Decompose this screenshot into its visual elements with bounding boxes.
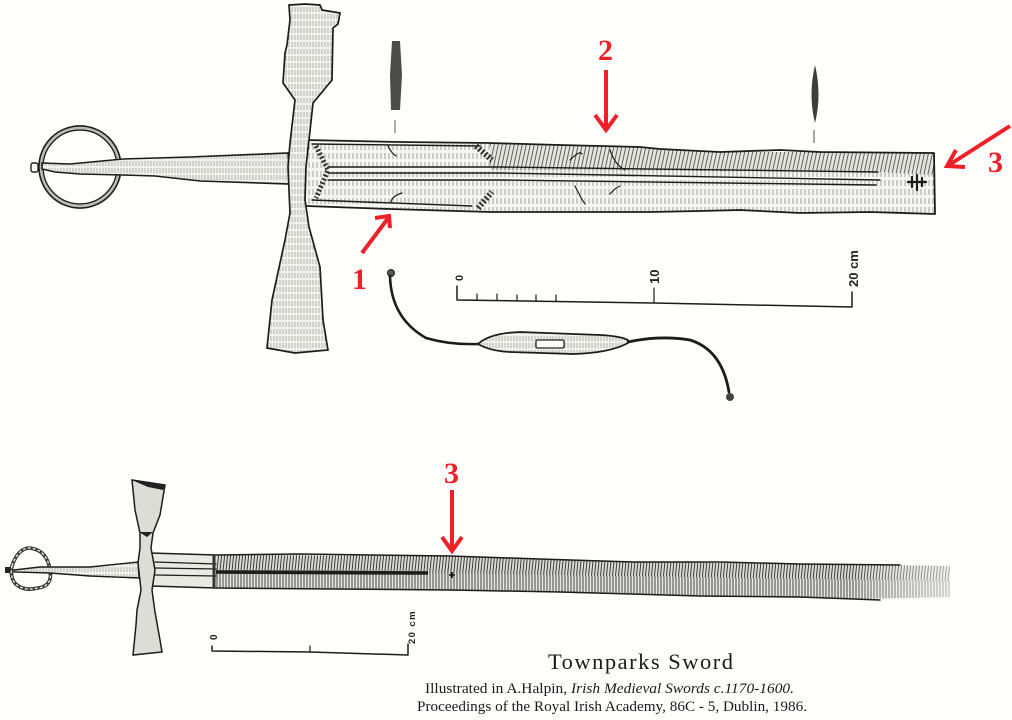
label 2: 2	[598, 34, 613, 67]
arrow 3, lower	[442, 490, 462, 551]
cross-section: grip	[390, 41, 402, 133]
title: Townparks Sword	[548, 649, 733, 674]
pommel ring	[31, 126, 121, 208]
arrow 1	[362, 216, 390, 253]
blade maker's mark	[908, 175, 926, 190]
scabbard chape section	[388, 270, 734, 401]
blade	[306, 140, 935, 214]
arrow 2	[595, 70, 617, 130]
lower scale label 20 cm: 20 cm	[407, 610, 418, 644]
citation line 2: Proceedings of the Royal Irish Academy, 86C - 5, Dublin, 1986.	[417, 699, 807, 715]
upper sword drawing	[31, 4, 935, 353]
arrow 3, upper	[947, 126, 1010, 167]
crossguard	[267, 4, 340, 353]
lower grip	[14, 562, 139, 578]
label 1: 1	[352, 263, 367, 296]
lower pommel ring	[5, 548, 50, 589]
scale label 20 cm: 20 cm	[846, 250, 861, 287]
citation line 1: Illustrated in A.Halpin, Irish Medieval Swords c.1170-1600.	[425, 681, 794, 697]
lower scale label 0: 0	[209, 634, 220, 640]
cross-section: blade	[812, 65, 818, 143]
label 3, upper: 3	[988, 146, 1003, 179]
grip	[42, 153, 290, 184]
lower guard dark marks	[134, 481, 165, 537]
scale label 10: 10	[647, 270, 662, 284]
lower sword drawing	[5, 480, 955, 655]
scale label 0: 0	[454, 275, 466, 281]
label 3, lower: 3	[444, 457, 459, 490]
lower scale bar	[209, 610, 418, 655]
lower blade	[150, 553, 955, 602]
upper scale bar	[454, 250, 861, 307]
lower crossguard	[132, 480, 165, 655]
